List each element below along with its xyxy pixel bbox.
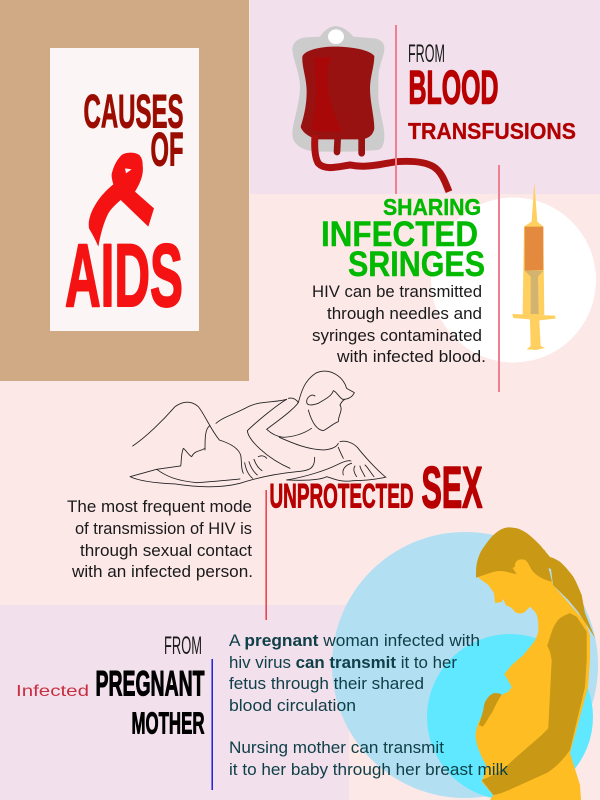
heading: unprotected sex: SEX	[422, 456, 483, 520]
title: OF	[150, 122, 184, 176]
heading: from infected pregnant mother	[16, 632, 204, 740]
text: syringes description	[312, 282, 486, 366]
icon: syringe	[512, 182, 556, 350]
divider line: syringes	[498, 165, 500, 392]
text: pregnant mother description: it to her baby through her breast milk	[229, 760, 508, 779]
heading: unprotected sex: UNPROTECTED	[270, 478, 414, 516]
heading: sharing infected syringes: INFECTED	[321, 215, 478, 254]
text: pregnant mother description	[229, 631, 508, 779]
heading: from blood transfusions: TRANSFUSIONS	[408, 118, 576, 144]
heading: from blood transfusions: FROM	[408, 40, 445, 68]
text: pregnant mother description: A pregnant woman infected with	[229, 631, 480, 650]
heading: from infected pregnant mother: FROM	[164, 632, 202, 660]
title: AIDS	[65, 225, 183, 325]
text: pregnant mother description: blood circulation	[229, 696, 356, 715]
text: syringes description: HIV can be transmitted	[312, 282, 482, 301]
heading: sharing infected syringes: SHARING	[383, 194, 481, 220]
panel: white title card	[50, 48, 199, 331]
text: sex description	[67, 497, 253, 581]
text: sex description: The most frequent mode	[67, 497, 252, 516]
heading: sharing infected syringes	[321, 194, 485, 284]
text: syringes description: syringes contaminated	[312, 326, 482, 345]
panel: tan title background	[0, 0, 249, 381]
divider line: blood	[395, 25, 397, 194]
heading: unprotected sex	[270, 456, 483, 520]
text: sex description: with an infected person.	[71, 562, 253, 581]
title	[65, 84, 184, 325]
panel: blood transfusions background	[250, 0, 600, 194]
heading: from infected pregnant mother: MOTHER	[132, 706, 204, 740]
text: pregnant mother description: hiv virus can transmit it to her	[229, 653, 457, 672]
panel: pregnant mother background	[0, 605, 349, 800]
heading: from blood transfusions	[408, 40, 576, 144]
divider line: pregnant	[212, 659, 213, 790]
heading: sharing infected syringes: SRINGES	[348, 245, 485, 284]
heading: from infected pregnant mother: Infected	[16, 683, 89, 700]
heading: from blood transfusions: BLOOD	[408, 60, 498, 114]
white circle behind syringe	[431, 198, 596, 362]
text: pregnant mother description: fetus through their shared	[229, 674, 424, 693]
icon: red ribbon	[89, 153, 154, 247]
text: sex description: of transmission of HIV is	[75, 519, 252, 538]
heading: from infected pregnant mother: PREGNANT	[96, 664, 204, 704]
small cyan circle	[427, 634, 593, 800]
title: CAUSES	[84, 84, 184, 138]
text: pregnant mother description: Nursing mother can transmit	[229, 738, 444, 757]
icon: blood bag	[292, 26, 449, 192]
text: syringes description: with infected blood.	[336, 347, 486, 366]
divider line: sex	[266, 490, 267, 620]
large blue circle	[332, 532, 598, 798]
icon: couple line drawing	[130, 371, 386, 487]
text: sex description: through sexual contact	[80, 541, 252, 560]
text: syringes description: through needles and	[327, 304, 482, 323]
icon: pregnant woman silhouette	[475, 527, 595, 800]
